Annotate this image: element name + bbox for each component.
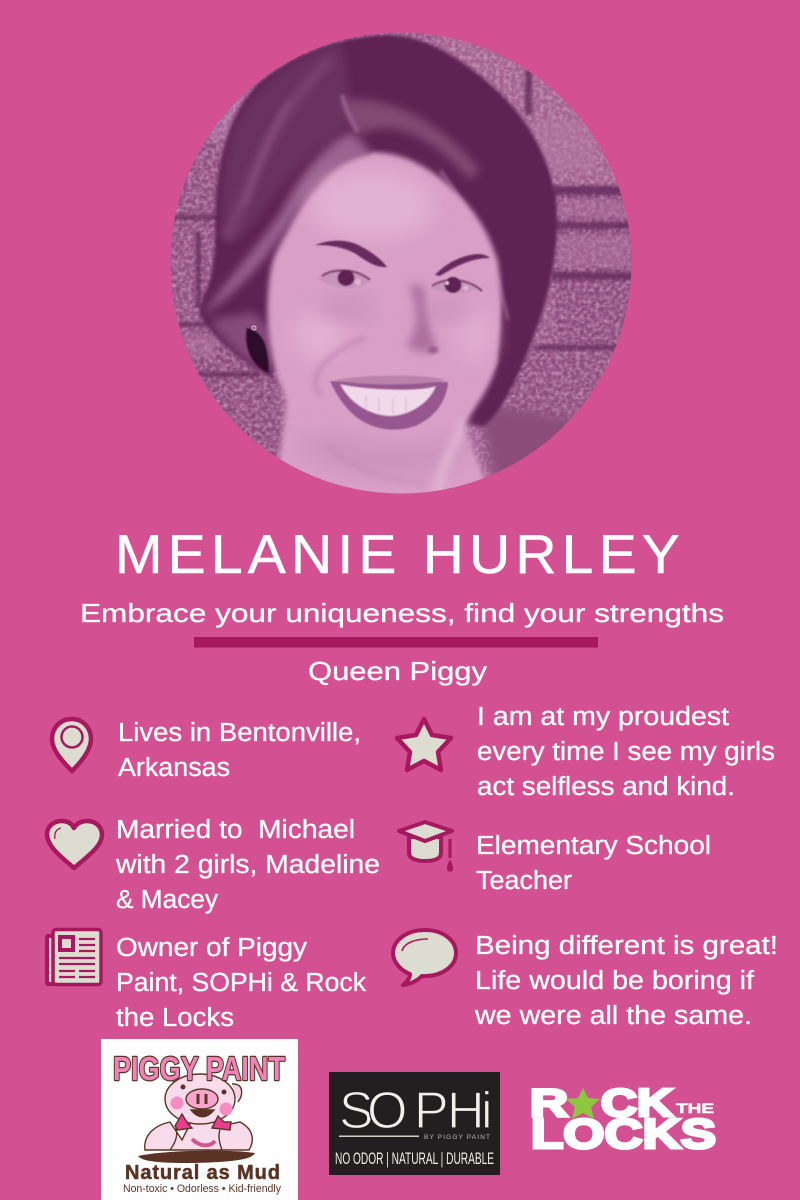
text: proudest: every time I see my girls bbox=[477, 738, 775, 766]
text: location: Arkansas bbox=[118, 754, 230, 782]
logo: SOPHi: SOPHi bbox=[339, 1082, 493, 1140]
role: Queen Piggy bbox=[308, 656, 487, 686]
icon: location pin bbox=[52, 719, 91, 771]
earring bbox=[252, 326, 256, 330]
nose bbox=[315, 285, 438, 396]
logo: Rock the Locks: CK bbox=[601, 1082, 673, 1125]
text: owner: the Locks bbox=[116, 1004, 234, 1032]
left eye bbox=[318, 270, 370, 288]
text: being different: we were all the same. bbox=[474, 1002, 752, 1030]
logo: SOPHi bbox=[329, 1072, 500, 1175]
pig illustration bbox=[145, 1074, 252, 1150]
text: proudest: I am at my proudest bbox=[477, 703, 729, 731]
icon: star bbox=[397, 719, 451, 770]
text: being different: Being different is great! bbox=[475, 932, 778, 960]
left eyebrow bbox=[315, 241, 387, 267]
text: being different bbox=[474, 932, 778, 1030]
text: family: with 2 girls, Madeline bbox=[115, 851, 380, 879]
green star bbox=[566, 1088, 600, 1119]
mud bbox=[138, 1151, 255, 1163]
text: owner bbox=[116, 934, 366, 1032]
face and neck bbox=[267, 153, 501, 505]
text: family: & Macey bbox=[116, 886, 218, 914]
logo: Rock the Locks bbox=[530, 1082, 716, 1157]
divider bar bbox=[194, 637, 598, 648]
logo wordmark: PIGGY PAINT bbox=[113, 1050, 285, 1087]
brick wall bbox=[170, 32, 632, 494]
logo: Piggy Paint bbox=[101, 1039, 298, 1200]
portrait photo bbox=[170, 32, 632, 494]
right eyebrow bbox=[435, 254, 490, 276]
tagline: Embrace your uniqueness, find your strengths bbox=[80, 598, 724, 628]
logo: Rock the Locks: THE bbox=[676, 1100, 714, 1116]
text: being different: Life would be boring if bbox=[475, 967, 755, 995]
text: teacher bbox=[476, 832, 711, 895]
text: family: Married to Michael bbox=[116, 816, 355, 844]
text: owner: Paint, SOPHi & Rock bbox=[116, 969, 366, 997]
text: location: Lives in Bentonville, bbox=[118, 719, 361, 747]
neck shadow bbox=[480, 404, 570, 474]
right eye bbox=[430, 277, 482, 293]
text: family bbox=[115, 816, 380, 914]
icon: heart bbox=[47, 821, 102, 868]
logo slogan: Natural as Mud bbox=[125, 1162, 280, 1184]
text: teacher: Elementary School bbox=[476, 832, 711, 860]
logo: SOPHi: NO ODOR | NATURAL | DURABLE bbox=[335, 1149, 494, 1168]
name title: MELANIE HURLEY bbox=[115, 523, 685, 585]
text: teacher: Teacher bbox=[476, 867, 573, 895]
text: location bbox=[118, 719, 361, 782]
logo: Rock the Locks: LOCKS bbox=[531, 1110, 716, 1157]
logo tagline: Non-toxic • Odorless • Kid-friendly bbox=[123, 1183, 281, 1195]
mouth bbox=[330, 375, 448, 430]
logo: SOPHi: BY PIGGY PAINT bbox=[424, 1134, 490, 1141]
text: proudest: act selfless and kind. bbox=[477, 773, 735, 801]
logo: Rock the Locks: R bbox=[530, 1082, 568, 1125]
icon: newspaper bbox=[45, 930, 101, 986]
text: owner: Owner of Piggy bbox=[116, 934, 307, 962]
text: proudest bbox=[477, 703, 775, 801]
icon: graduation cap bbox=[399, 822, 452, 871]
icon: speech bubble bbox=[393, 930, 456, 985]
hair bbox=[200, 35, 557, 426]
